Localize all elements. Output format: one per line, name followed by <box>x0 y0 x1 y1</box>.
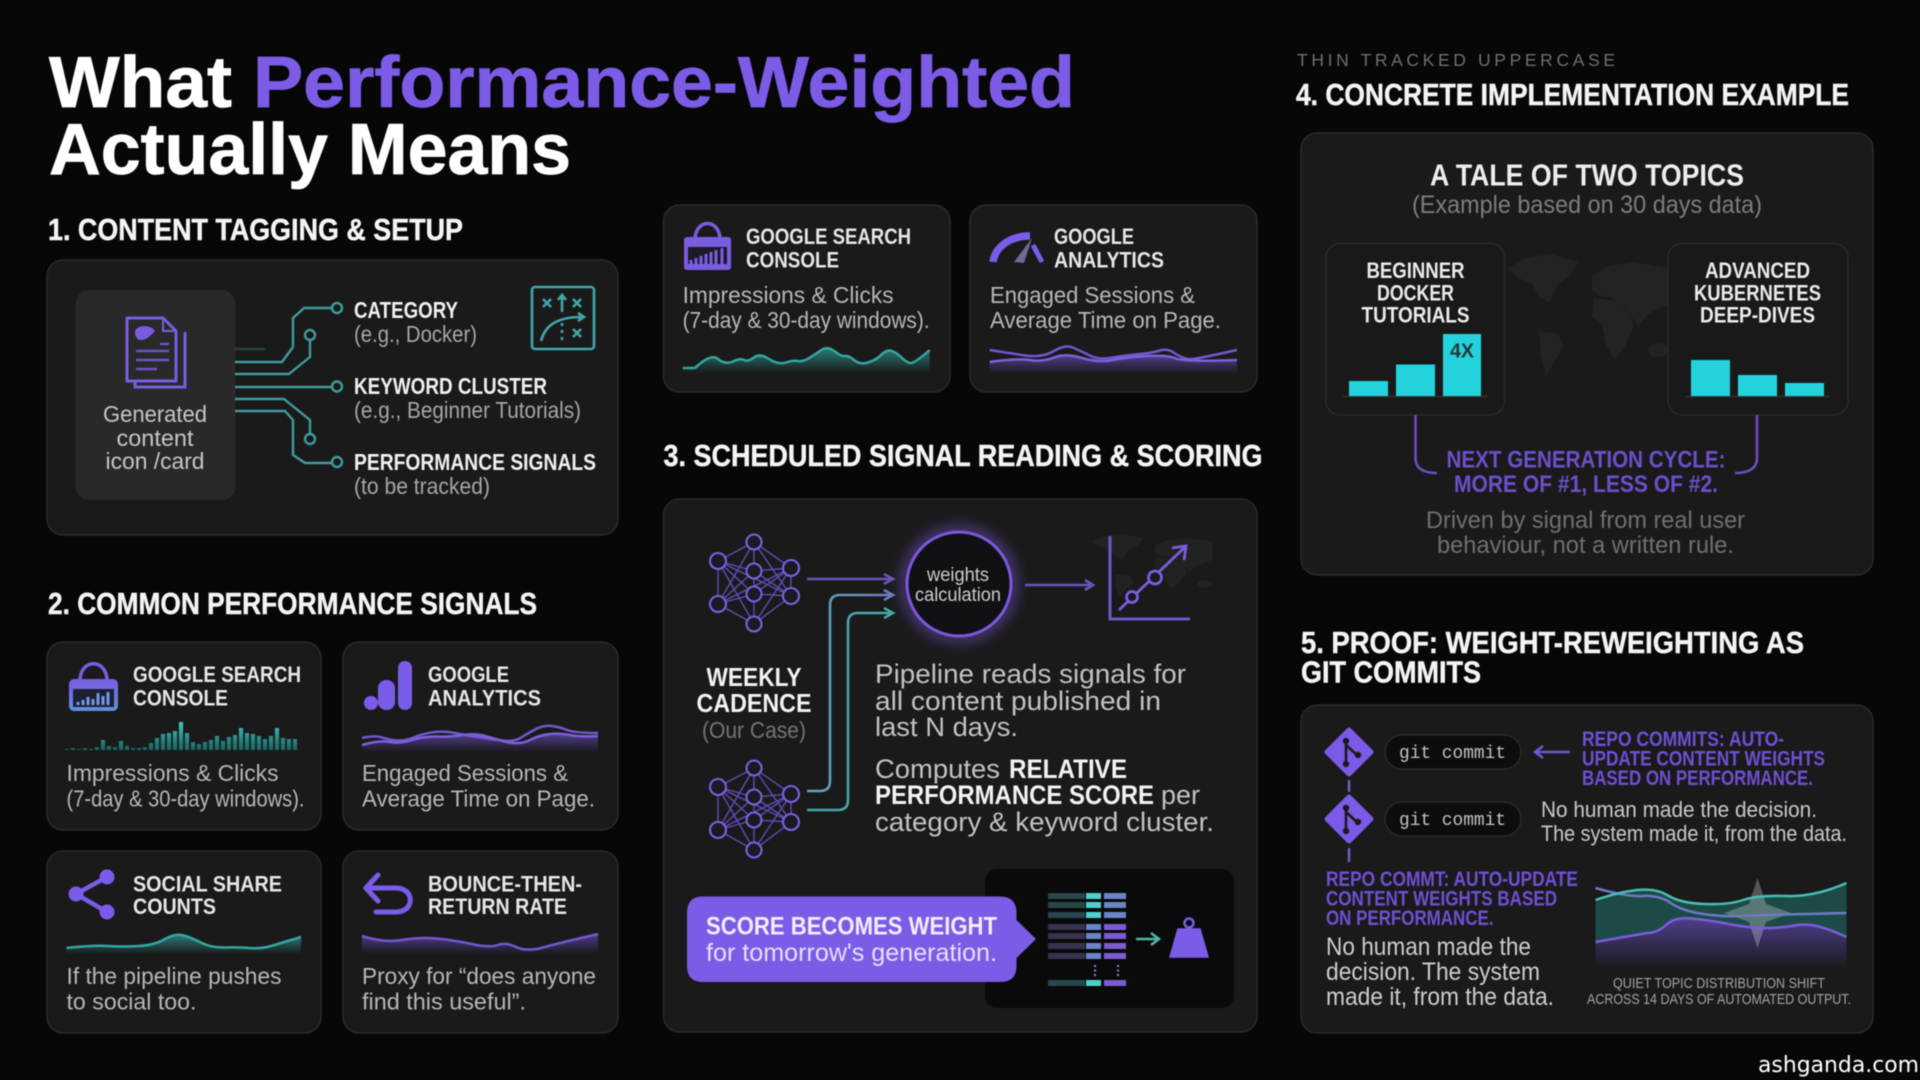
label: performance signals <box>354 449 596 499</box>
title: Performance-Weighted <box>253 43 1075 123</box>
chart: impressions line <box>683 348 930 373</box>
chart: shares <box>66 935 301 954</box>
text: card heading <box>133 662 301 710</box>
text: relative performance score: category & keyword cluster. <box>875 807 1214 837</box>
text: relative performance score <box>875 754 1214 837</box>
callout: score becomes weight <box>687 896 1036 982</box>
icon: return arrow <box>366 875 410 912</box>
card: advanced kubernetes deep-dives: ADVANCED <box>1705 258 1810 283</box>
weights circle <box>906 531 1012 637</box>
bar chart: beginner: 4X <box>1450 340 1475 362</box>
text: driven by signal: behaviour, not a written rule. <box>1437 532 1734 559</box>
card: google analytics <box>343 642 618 830</box>
text: weekly cadence <box>696 662 812 743</box>
text: no human (left): decision. The system <box>1326 958 1540 986</box>
text: no human (right): The system made it, from the data. <box>1541 821 1847 846</box>
text: repo commits note: REPO COMMITS: AUTO- <box>1582 728 1784 751</box>
callout: score becomes weight: for tomorrow's generation. <box>706 939 997 967</box>
pill: git commit 2: git commit <box>1399 811 1506 831</box>
pill: git commit 1 <box>1385 735 1521 769</box>
icon: gauge <box>993 236 1042 263</box>
panel: proof git commits <box>1301 705 1873 1033</box>
card: google analytics (mid) <box>970 205 1257 392</box>
text: chart caption: ACROSS 14 DAYS OF AUTOMATED OUTPUT. <box>1587 991 1851 1008</box>
text: card heading: RETURN RATE <box>428 894 567 919</box>
text: relative performance score: Computes <box>875 754 1000 784</box>
text: repo commit note: ON PERFORMANCE. <box>1326 907 1494 930</box>
text: card body: Proxy for “does anyone <box>362 963 596 989</box>
text: panel title: A TALE OF TWO TOPICS <box>1430 158 1744 192</box>
text: card heading <box>1054 224 1164 272</box>
label: category: (e.g., Docker) <box>354 321 477 347</box>
text: panel title: (Example based on 30 days data) <box>1412 191 1762 219</box>
world map <box>1508 254 1668 377</box>
label: keyword cluster: KEYWORD CLUSTER <box>354 373 547 399</box>
text: card body <box>362 963 596 1014</box>
heading: section 3: 3. SCHEDULED SIGNAL READING & SCORING <box>664 438 1262 473</box>
chart: trend with map <box>1091 534 1213 619</box>
watermark: ashganda.com <box>1758 1053 1919 1078</box>
text: no human (right): No human made the decision. <box>1541 797 1817 822</box>
callout: score becomes weight: SCORE BECOMES WEIGHT <box>706 912 997 940</box>
text: card body: Engaged Sessions & <box>990 282 1195 308</box>
text: panel title <box>1412 158 1762 219</box>
heading: section 5: 5. PROOF: WEIGHT-REWEIGHTING AS <box>1301 625 1804 660</box>
text: card label: content <box>116 425 194 451</box>
heading: section 5: GIT COMMITS <box>1301 654 1481 690</box>
text: weekly cadence: CADENCE <box>696 688 812 718</box>
label: keyword cluster: (e.g., Beginner Tutorials) <box>354 397 581 423</box>
text: repo commits note: BASED ON PERFORMANCE. <box>1582 767 1813 790</box>
text: relative performance score: PERFORMANCE SCORE <box>875 780 1154 810</box>
icon: analytics bars <box>364 661 412 710</box>
heading: section 2: 2. COMMON PERFORMANCE SIGNALS <box>48 586 537 621</box>
label: thin tracked uppercase: THIN TRACKED UPPERCASE <box>1297 50 1615 70</box>
card: advanced kubernetes deep-dives: KUBERNETES <box>1694 280 1821 306</box>
title: Actually Means <box>49 110 571 190</box>
chart: impressions bars <box>67 722 295 750</box>
weights circle: weights <box>926 565 989 586</box>
text: chart caption: QUIET TOPIC DISTRIBUTION SHIFT <box>1613 975 1825 992</box>
text: repo commit note <box>1326 868 1578 930</box>
chart: topic distribution <box>1596 878 1846 968</box>
arrows into weights circle <box>807 574 893 810</box>
text: card heading: BOUNCE-THEN- <box>428 872 582 896</box>
card: beginner docker tutorials: TUTORIALS <box>1362 302 1470 328</box>
text: card heading: CONSOLE <box>133 686 228 710</box>
text: repo commits note: UPDATE CONTENT WEIGHTS <box>1582 748 1825 770</box>
text: card body: If the pipeline pushes <box>66 963 282 989</box>
card: bounce-then-return <box>343 851 618 1033</box>
text: repo commit note: CONTENT WEIGHTS BASED <box>1326 888 1557 910</box>
text: no human (left): No human made the <box>1326 933 1531 961</box>
text: card body: Engaged Sessions & <box>362 760 568 786</box>
text: card heading: ANALYTICS <box>428 686 541 710</box>
text: card heading: GOOGLE <box>1054 224 1134 249</box>
card: beginner docker tutorials: DOCKER <box>1377 280 1454 306</box>
text: card body <box>66 963 282 1014</box>
text: card body: find this useful”. <box>362 988 526 1014</box>
text: next generation cycle: MORE OF #1, LESS OF #2. <box>1454 471 1718 498</box>
text: next generation cycle: NEXT GENERATION CYCLE: <box>1446 446 1726 474</box>
text: card body: Average Time on Page. <box>362 786 595 812</box>
text: pipeline description: Pipeline reads signals for <box>875 659 1186 689</box>
title <box>49 43 1075 190</box>
icon: console bag purple <box>684 224 731 270</box>
text: no human (left) <box>1326 933 1554 1011</box>
card: google search console (mid) <box>664 205 950 392</box>
text: driven by signal <box>1426 507 1745 559</box>
panel: scheduled signal reading <box>664 499 1257 1032</box>
icon: document <box>127 318 185 387</box>
chart: engaged sessions <box>362 726 598 752</box>
text: card label: icon /card <box>106 448 204 474</box>
panel: concrete implementation example <box>1301 133 1873 575</box>
text: weekly cadence: (Our Case) <box>702 717 806 743</box>
text: repo commits note <box>1582 728 1825 790</box>
text: card heading: COUNTS <box>133 894 216 919</box>
text: card body: Average Time on Page. <box>990 307 1221 333</box>
card: beginner docker tutorials <box>1326 244 1504 415</box>
heading: section 1: 1. CONTENT TAGGING & SETUP <box>48 212 463 247</box>
text: next generation cycle <box>1446 446 1726 498</box>
panel: content tagging <box>47 260 618 535</box>
text: driven by signal: Driven by signal from real user <box>1426 507 1745 534</box>
icon: network top <box>710 534 799 632</box>
text: no human (left): made it, from the data. <box>1326 983 1554 1011</box>
text: card label <box>103 401 207 474</box>
weights circle: calculation <box>915 585 1001 606</box>
weights table <box>1048 893 1126 986</box>
bracket connectors <box>1416 415 1757 473</box>
text: card heading <box>746 224 911 272</box>
card: google search console <box>47 642 321 830</box>
text: relative performance score: RELATIVE <box>1009 754 1127 784</box>
card: advanced kubernetes deep-dives: DEEP-DIVES <box>1700 302 1815 328</box>
heading: section 5 <box>1301 625 1804 690</box>
pill: git commit 1: git commit <box>1399 744 1506 764</box>
text: card heading: GOOGLE SEARCH <box>133 662 301 687</box>
arrow to weight <box>1136 933 1159 945</box>
icon: console bag <box>69 664 118 711</box>
text: card heading: SOCIAL SHARE <box>133 872 282 896</box>
dark result box <box>985 869 1234 1008</box>
card: social share counts <box>47 851 321 1033</box>
arrow to trend <box>1025 580 1093 590</box>
text: card heading <box>428 662 541 710</box>
text: card heading: ANALYTICS <box>1054 248 1164 272</box>
label: performance signals: (to be tracked) <box>354 473 490 499</box>
label: performance signals: PERFORMANCE SIGNALS <box>354 449 596 475</box>
text: pipeline description <box>875 659 1186 742</box>
text: card body: Impressions & Clicks <box>66 760 278 786</box>
card: generated content <box>76 290 236 500</box>
text: card body: (7-day & 30-day windows). <box>683 307 930 333</box>
card: beginner docker tutorials: BEGINNER <box>1366 258 1465 283</box>
text: pipeline description: last N days. <box>875 712 1018 742</box>
label: category <box>354 297 477 347</box>
text: card body: (7-day & 30-day windows). <box>66 786 304 812</box>
pill: git commit 2 <box>1385 802 1521 836</box>
text: card body <box>66 760 304 812</box>
text: card body <box>990 282 1221 333</box>
label: category: CATEGORY <box>354 297 458 323</box>
chart: engaged line <box>990 347 1237 374</box>
icon: network bottom <box>710 760 799 858</box>
text: card heading <box>133 872 282 919</box>
connector lines <box>235 303 342 467</box>
text: pipeline description: all content published in <box>875 686 1161 716</box>
icon: weight <box>1170 918 1208 957</box>
text: chart caption <box>1587 975 1851 1008</box>
text: card body <box>362 760 595 812</box>
text: card body: to social too. <box>66 988 196 1014</box>
arrow: to git commit <box>1535 746 1570 758</box>
chart: bounce <box>362 934 598 954</box>
bar chart: beginner <box>1343 334 1488 396</box>
text: card heading: GOOGLE SEARCH <box>746 224 911 249</box>
title: What <box>49 43 232 123</box>
text: card label: Generated <box>103 401 207 427</box>
icon: teal tactic board <box>532 287 594 349</box>
text: card heading: GOOGLE <box>428 662 509 687</box>
text: card body <box>683 282 930 333</box>
label: keyword cluster <box>354 373 581 423</box>
text: repo commit note: REPO COMMT: AUTO-UPDATE <box>1326 868 1578 891</box>
text: relative performance score: per <box>1161 780 1200 810</box>
bar chart: advanced <box>1685 360 1829 396</box>
text: weekly cadence: WEEKLY <box>706 662 802 692</box>
card: advanced kubernetes deep-dives <box>1668 244 1848 415</box>
text: card heading <box>428 872 582 919</box>
text: card heading: CONSOLE <box>746 248 839 272</box>
git timeline <box>1327 730 1371 862</box>
text: no human (right) <box>1541 797 1847 846</box>
text: card body: Impressions & Clicks <box>683 282 894 308</box>
icon: share <box>68 870 114 920</box>
